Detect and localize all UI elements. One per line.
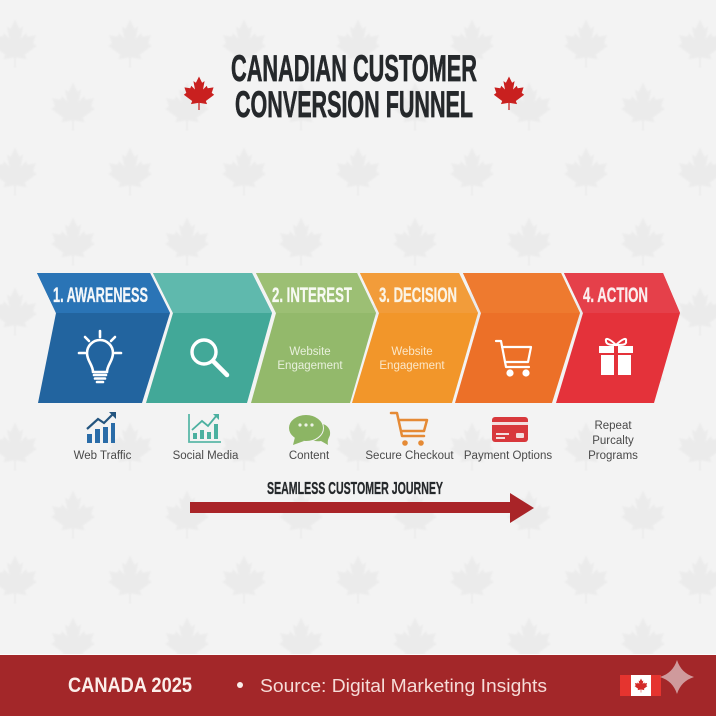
icon: magnifier bbox=[192, 340, 227, 375]
footer band: Source: Digital Marketing Insights bbox=[260, 676, 547, 696]
item: repeat loyalty programs bbox=[588, 420, 638, 462]
footer band bbox=[0, 654, 716, 716]
icon: gift bbox=[599, 339, 633, 375]
panel: decision: Engagement bbox=[379, 360, 445, 372]
panel: interest: Website bbox=[289, 346, 331, 358]
panel: interest: 2. INTEREST bbox=[272, 284, 352, 307]
icon: cart bbox=[496, 341, 531, 376]
footer band: CANADA 2025 bbox=[68, 673, 192, 697]
item: payment options bbox=[464, 417, 552, 462]
icon: light bulb bbox=[79, 331, 121, 382]
panel: decision: Website bbox=[391, 346, 433, 358]
title bbox=[231, 48, 477, 125]
stage items row bbox=[74, 412, 638, 462]
item: repeat loyalty programs: Repeat bbox=[594, 420, 632, 432]
item: payment options: Payment Options bbox=[464, 450, 552, 462]
panel: interest: Engagement bbox=[277, 360, 343, 372]
item: repeat loyalty programs: Programs bbox=[588, 450, 638, 462]
panel: action: 4. ACTION bbox=[583, 284, 648, 307]
panel: interest bbox=[251, 273, 376, 403]
panel: awareness bbox=[37, 273, 170, 403]
title: CANADIAN CUSTOMER bbox=[231, 48, 477, 89]
item: web traffic bbox=[74, 412, 132, 462]
item: content: Content bbox=[289, 450, 330, 462]
item: web traffic: Web Traffic bbox=[74, 450, 132, 462]
journey label: SEAMLESS CUSTOMER JOURNEY bbox=[267, 478, 443, 498]
panel: social bbox=[146, 273, 272, 403]
item: social media bbox=[173, 414, 239, 462]
item: repeat loyalty programs: Purcalty bbox=[592, 435, 634, 447]
icon: sparkle bbox=[660, 660, 694, 694]
panel: decision: 3. DECISION bbox=[379, 284, 457, 307]
item: secure checkout: Secure Checkout bbox=[365, 450, 454, 462]
panel: decision bbox=[352, 273, 478, 403]
panel: action bbox=[556, 273, 680, 403]
title: CONVERSION FUNNEL bbox=[235, 84, 473, 125]
item: content bbox=[288, 414, 330, 462]
icon: canadian flag bbox=[620, 675, 661, 696]
arrow: journey bbox=[190, 493, 534, 523]
item: secure checkout bbox=[365, 413, 454, 462]
panel: awareness: 1. AWARENESS bbox=[53, 284, 148, 307]
item: social media: Social Media bbox=[173, 450, 239, 462]
panel: checkout bbox=[455, 273, 580, 403]
icon: left maple leaf bbox=[184, 76, 214, 110]
funnel chevrons bbox=[37, 273, 680, 403]
icon: right maple leaf bbox=[494, 76, 524, 110]
